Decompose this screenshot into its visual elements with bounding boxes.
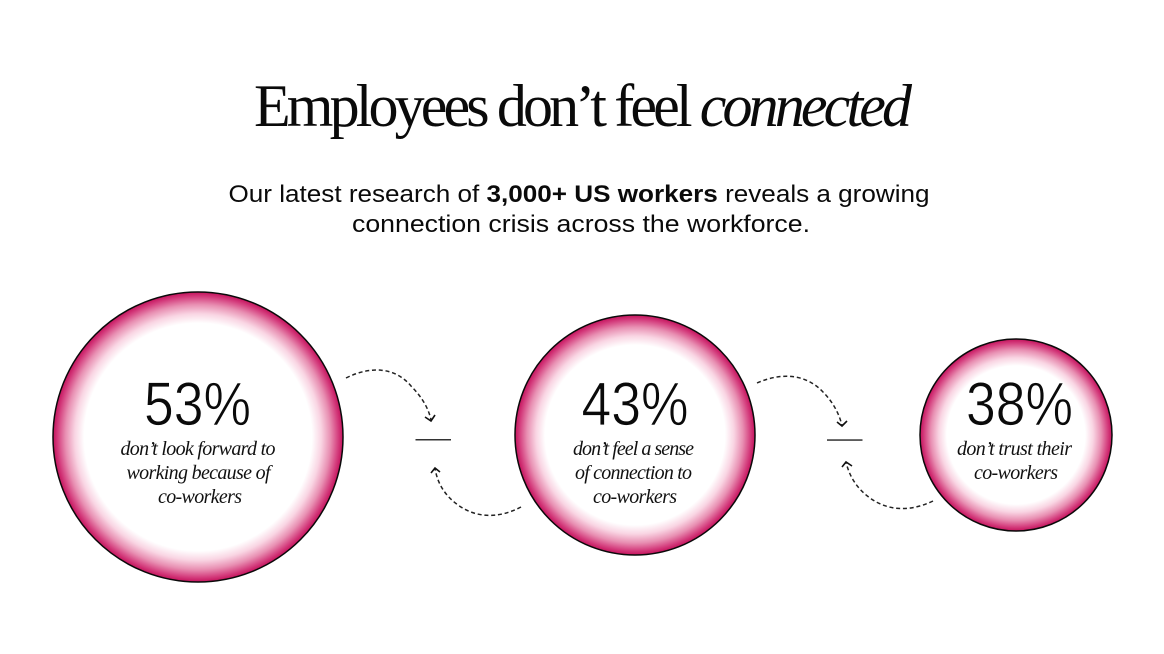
panel: 38% stat: 38% — [966, 370, 1073, 438]
arrow: 43% to minus — [431, 468, 521, 515]
arrow: 38% to minus — [842, 462, 933, 509]
panel: 43% stat: 43% — [582, 370, 688, 438]
intro text: Our latest research of 3,000+ US workers reveals a growing — [228, 181, 929, 208]
panel: 38% stat: co-workers — [974, 462, 1058, 484]
intro text: connection crisis across the workforce. — [352, 211, 810, 238]
panel: 43% stat: don’t feel a sense — [573, 438, 694, 460]
arrow: 43% to minus — [757, 376, 847, 426]
panel: 53% stat: don’t look forward to — [120, 438, 276, 460]
panel: 38% stat: don’t trust their — [957, 438, 1072, 460]
panel: 43% stat — [515, 315, 755, 555]
title: Employees don’t feel connected — [254, 73, 913, 139]
panel: 53% stat — [53, 292, 343, 582]
panel: 53% stat: 53% — [144, 370, 251, 438]
panel: 38% stat — [920, 339, 1112, 531]
panel: 43% stat: of connection to — [575, 462, 692, 484]
minus sign 1 — [416, 439, 451, 440]
intro text — [228, 181, 929, 238]
minus sign 2 — [827, 439, 862, 441]
panel: 53% stat: co-workers — [158, 486, 242, 508]
arrow: 53% to minus — [346, 370, 435, 421]
panel: 53% stat: working because of — [126, 462, 273, 484]
panel: 43% stat: co-workers — [593, 486, 677, 508]
